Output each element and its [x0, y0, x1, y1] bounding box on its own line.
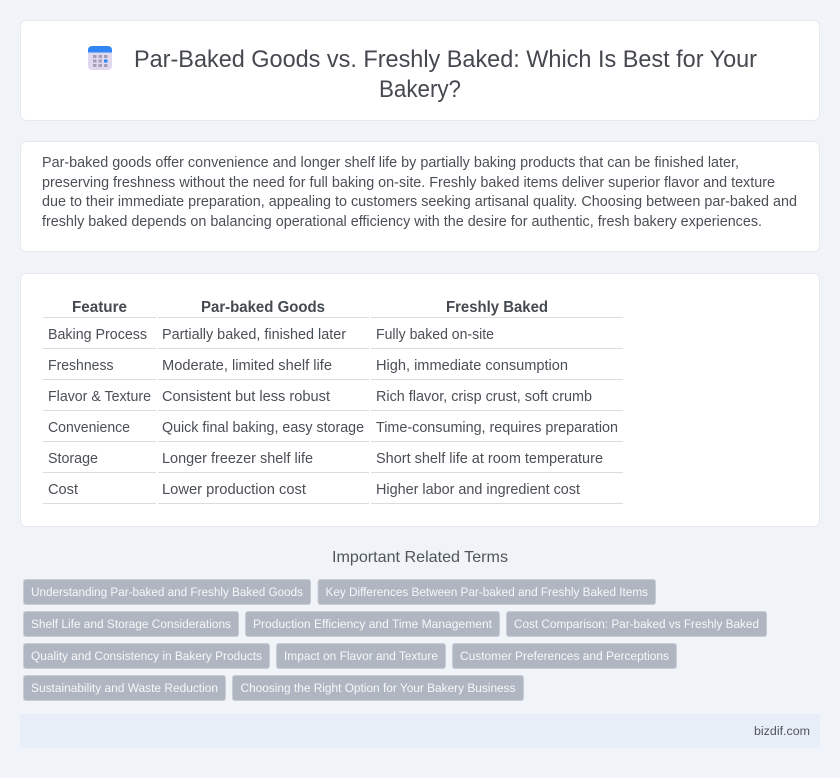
chip: Cost Comparison: Par-baked vs Freshly Baked: [514, 617, 759, 631]
chip: Understanding Par-baked and Freshly Baked Goods: [31, 585, 303, 599]
table row: flavor and texture: Consistent but less robust: [162, 389, 330, 405]
chip: [24, 580, 310, 604]
table row: storage: Storage: [48, 451, 98, 467]
footer: [20, 714, 820, 748]
table row: baking process: Baking Process: [48, 327, 147, 343]
chip: [24, 612, 238, 636]
table row: convenience: [43, 420, 623, 442]
title: Par-Baked Goods vs. Freshly Baked: Which Is Best for Your: [134, 46, 757, 73]
table row: convenience: Quick final baking, easy storage: [162, 420, 364, 436]
chip: [452, 644, 676, 668]
table row: storage: [43, 451, 623, 473]
table row: flavor and texture: [43, 389, 623, 411]
chip: [246, 612, 500, 636]
chip: [506, 612, 766, 636]
text block: description: preserving freshness without the need for full baking on-site. Freshly baked items deliver superior flavor and texture: [42, 175, 775, 191]
table header: Freshly Baked: [446, 299, 548, 316]
chip: [24, 676, 226, 700]
heading: related terms: Important Related Terms: [332, 549, 508, 566]
table row: freshness: Moderate, limited shelf life: [162, 358, 332, 374]
footer source: bizdif.com: [754, 724, 810, 738]
table row: baking process: Partially baked, finished later: [162, 327, 346, 343]
table header: [43, 299, 623, 318]
icon: calendar: [88, 46, 112, 70]
chip: [232, 676, 524, 700]
text block: description: Par-baked goods offer convenience and longer shelf life by partially baking products that can be finished later,: [42, 155, 739, 171]
table row: cost: [43, 482, 623, 504]
table row: freshness: [43, 358, 623, 380]
chip: Impact on Flavor and Texture: [284, 649, 438, 663]
table row: cost: Lower production cost: [162, 482, 306, 498]
panel: header: [20, 20, 820, 120]
table row: convenience: Convenience: [48, 420, 130, 436]
table header: Feature: [72, 299, 127, 316]
table header: Par-baked Goods: [201, 299, 325, 316]
table row: baking process: [43, 327, 623, 349]
text block: description: due to their immediate preparation, appealing to customers seeking artisanal quality. Choosing between par-baked and: [42, 194, 797, 210]
table row: freshness: Freshness: [48, 358, 114, 374]
panel: comparison table: [20, 274, 820, 526]
chip: Shelf Life and Storage Considerations: [31, 617, 231, 631]
chip: Quality and Consistency in Bakery Products: [31, 649, 262, 663]
table row: baking process: Fully baked on-site: [376, 327, 494, 343]
text block: description: freshly baked depends on balancing operational efficiency with the desire for authentic, fresh bakery experiences.: [42, 214, 762, 230]
chip: Key Differences Between Par-baked and Freshly Baked Items: [326, 585, 648, 599]
table row: storage: Short shelf life at room temperature: [376, 451, 603, 467]
chip: [318, 580, 656, 604]
chip: Production Efficiency and Time Management: [253, 617, 493, 631]
chip: Choosing the Right Option for Your Bakery Business: [240, 681, 516, 695]
table row: cost: Cost: [48, 482, 78, 498]
chip: Sustainability and Waste Reduction: [31, 681, 218, 695]
related terms chips: [24, 580, 766, 700]
chip: [24, 644, 270, 668]
table row: storage: Longer freezer shelf life: [162, 451, 313, 467]
panel: description: [20, 142, 820, 252]
table row: flavor and texture: Rich flavor, crisp crust, soft crumb: [376, 389, 592, 405]
table row: flavor and texture: Flavor & Texture: [48, 389, 151, 405]
table row: convenience: Time-consuming, requires preparation: [376, 420, 618, 436]
title: Bakery?: [379, 76, 461, 103]
table row: cost: Higher labor and ingredient cost: [376, 482, 580, 498]
table row: freshness: High, immediate consumption: [376, 358, 568, 374]
chip: [276, 644, 446, 668]
chip: Customer Preferences and Perceptions: [460, 649, 669, 663]
